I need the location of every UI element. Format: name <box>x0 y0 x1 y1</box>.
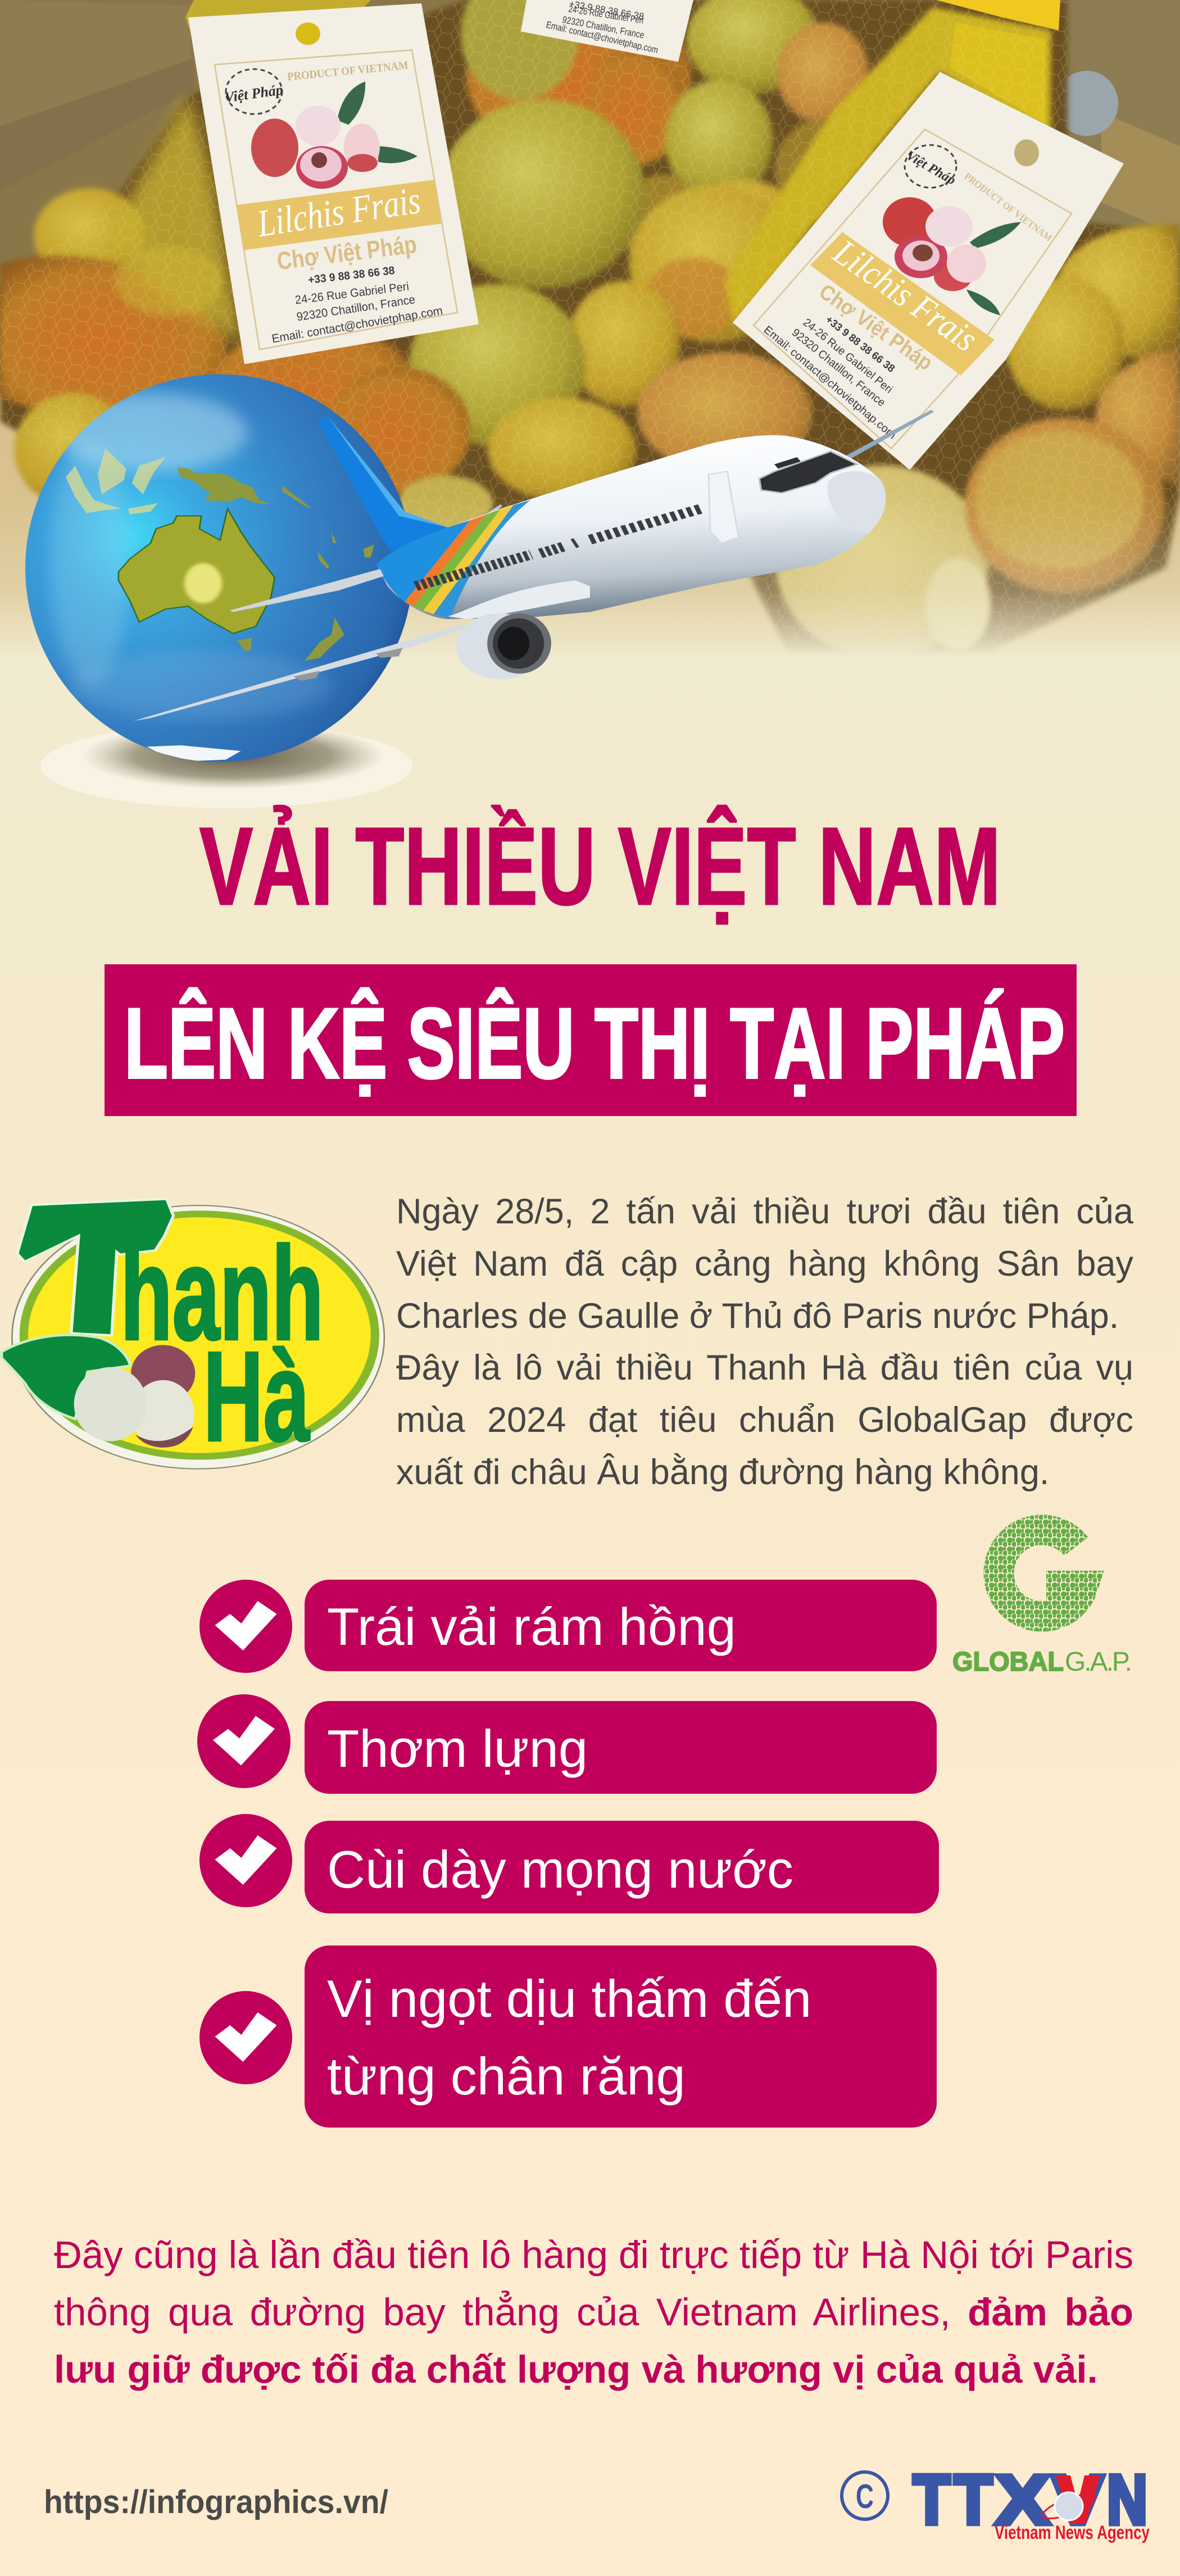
label tag: right: Email: contact@chovietphap.com <box>761 324 898 442</box>
closing paragraph: thông qua đường bay thẳng của Vietnam Airlines, đảm bảo <box>54 2291 1133 2334</box>
plane tail fin <box>318 415 448 552</box>
pill: Thơm lựng <box>305 1701 937 1794</box>
check icon 3 <box>199 1814 292 1907</box>
lychees in yellow net bag <box>0 0 1180 659</box>
globe base shadow <box>40 722 412 808</box>
intro paragraph: mùa 2024 đạt tiêu chuẩn GlobalGap được <box>396 1400 1133 1440</box>
door <box>709 471 738 543</box>
label tag: left: Email: contact@chovietphap.com <box>271 304 444 346</box>
intro paragraph: Việt Nam đã cập cảng hàng không Sân bay <box>396 1244 1133 1284</box>
label tag: right <box>733 72 1124 470</box>
intro paragraph: Đây là lô vải thiều Thanh Hà đầu tiên của vụ <box>396 1348 1133 1387</box>
icon: grey disc behind the net <box>1055 71 1118 136</box>
check icon 2 <box>197 1694 291 1788</box>
plastic yellow cap on the net <box>936 0 1060 30</box>
intro paragraph <box>396 1192 1134 1492</box>
logo: GLOBALG.A.P. <box>952 1515 1132 1677</box>
label tag: left: PRODUCT OF VIETNAM <box>287 59 409 83</box>
label tag: right: Việt Pháp <box>904 148 958 188</box>
island: New Guinea <box>177 467 271 505</box>
logo: GLOBALG.A.P.: G.A.P. <box>1065 1647 1132 1677</box>
intro paragraph: xuất đi châu Âu bằng đường hàng không. <box>396 1453 1049 1492</box>
pill: Trái vải rám hồng: Trái vải rám hồng <box>327 1597 736 1656</box>
label tag: top centre: Email: contact@chovietphap.com <box>545 19 659 56</box>
logo: GLOBALG.A.P.: GLOBAL <box>952 1647 1064 1677</box>
source url: https://infographics.vn/ <box>44 2484 388 2520</box>
label tag: right: +33 9 88 38 66 38 <box>823 314 897 375</box>
cockpit windows <box>759 451 857 493</box>
belly fairing <box>448 580 590 619</box>
logo lychees <box>74 1345 195 1448</box>
continent: Australia <box>119 509 275 633</box>
label tag: top centre: 24-26 Rue Gabriel Peri <box>568 3 645 26</box>
pill: Vị ngọt dịu thấm đến từng chân răng <box>305 1945 937 2128</box>
check icon 1 <box>199 1580 292 1673</box>
label tag: right: 92320 Chatillon, France <box>789 326 888 409</box>
label tag: right: Lilchis Frais <box>826 232 985 359</box>
label tag: left: Chợ Việt Pháp <box>275 230 418 275</box>
label tag: left: Lilchis Frais <box>254 179 423 245</box>
pill: Vị ngọt dịu thấm đến từng chân răng: Vị ngọt dịu thấm đến <box>327 1969 811 2028</box>
main wing <box>134 625 466 721</box>
label tag: left: Việt Pháp <box>224 81 284 106</box>
far wing tip <box>846 410 934 459</box>
photo background: cardboard box <box>0 0 1180 669</box>
label tag: right: 24-26 Rue Gabriel Peri <box>801 316 895 396</box>
pill: Trái vải rám hồng <box>305 1580 937 1671</box>
continent: Antarctica <box>147 745 241 761</box>
label tag: top centre: 92320 Chatillon, France <box>561 14 645 40</box>
logo: TTXVN Vietnam News Agency <box>905 2467 1158 2546</box>
label tag: left <box>188 3 479 364</box>
islands: Pacific <box>282 486 374 569</box>
copyright symbol <box>837 2468 893 2524</box>
label tag: top centre <box>521 0 693 62</box>
islands: Indonesia <box>66 448 166 515</box>
closing paragraph: lưu giữ được tối đa chất lượng và hương vị của quả vải. <box>54 2348 1098 2391</box>
label tag: left: 92320 Chatillon, France <box>296 293 416 324</box>
label tag: right: Chợ Việt Pháp <box>815 280 937 375</box>
pill: Vị ngọt dịu thấm đến từng chân răng: từng chân răng <box>327 2047 686 2106</box>
label tag: left: 24-26 Rue Gabriel Peri <box>294 280 410 307</box>
intro paragraph: Charles de Gaulle ở Thủ đô Paris nước Pháp. <box>396 1296 1119 1336</box>
jet engine <box>456 614 551 679</box>
closing paragraph: Đây cũng là lần đầu tiên lô hàng đi trực tiếp từ Hà Nội tới Paris <box>54 2233 1133 2276</box>
pill: Thơm lựng: Thơm lựng <box>327 1719 588 1778</box>
check icon 4 <box>199 1991 292 2084</box>
pill: Cùi dày mọng nước <box>305 1821 939 1913</box>
plane <box>134 410 934 721</box>
island: Tasmania <box>237 638 252 651</box>
label tag: left: +33 9 88 38 66 38 <box>307 265 396 287</box>
plane fuselage <box>376 435 886 619</box>
intro paragraph: Ngày 28/5, 2 tấn vải thiều tươi đầu tiên của <box>396 1192 1133 1231</box>
logo: Thanh Hà <box>0 1198 385 1470</box>
copyright symbol: C <box>856 2478 874 2515</box>
plane nose cone <box>827 471 886 533</box>
checklist <box>197 1580 939 2128</box>
logo letter T <box>19 1200 172 1334</box>
logo leaf <box>2 1335 130 1419</box>
closing paragraph <box>54 2233 1133 2391</box>
rear stabiliser <box>229 569 384 612</box>
islands: New Zealand <box>305 618 344 661</box>
tail livery stripes <box>376 500 530 619</box>
globe <box>25 374 413 762</box>
photo fade into cream background <box>0 495 1180 669</box>
label tag: right: PRODUCT OF VIETNAM <box>963 170 1054 244</box>
cabin windows <box>416 509 701 586</box>
hero illustration: lychee photo, globe and plane <box>0 0 1180 906</box>
pill: Cùi dày mọng nước: Cùi dày mọng nước <box>327 1840 793 1899</box>
